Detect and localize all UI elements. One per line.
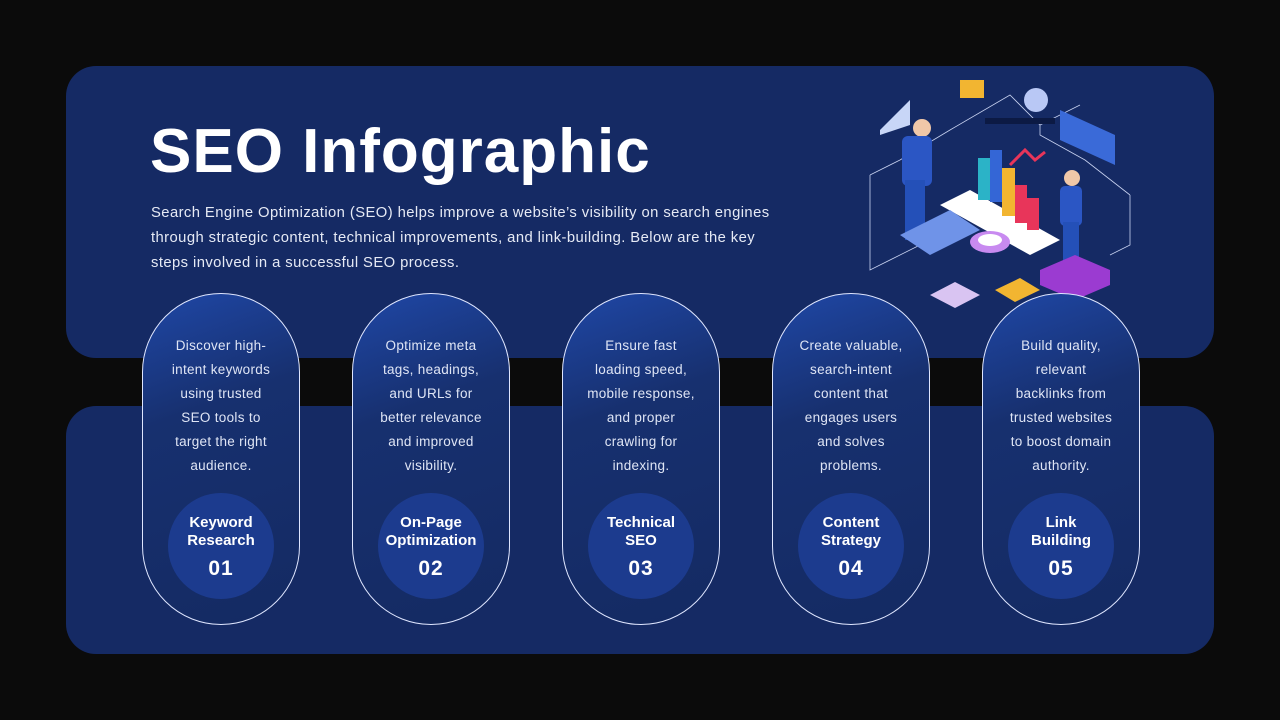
step 2: and URLs for (389, 386, 473, 401)
badge 03: 03 (628, 557, 654, 580)
step 1 (142, 293, 300, 625)
step 4 (772, 293, 930, 625)
step 5: trusted websites (1010, 410, 1112, 425)
step 5 (982, 293, 1140, 625)
badge 01: 01 (208, 557, 234, 580)
step 4: and solves (817, 434, 885, 449)
step 5: authority. (1032, 458, 1090, 473)
step 3: Ensure fast (605, 338, 677, 353)
badge 02 (378, 493, 484, 599)
badge 03 (588, 493, 694, 599)
step 3: loading speed, (595, 362, 687, 377)
illustration: SEO team analytics (870, 80, 1130, 308)
step 4: Create valuable, (799, 338, 903, 353)
step 5: Build quality, (1021, 338, 1101, 353)
podium (1040, 255, 1110, 300)
step 1: target the right (175, 434, 267, 449)
step 5: to boost domain (1011, 434, 1111, 449)
chart board (940, 118, 1060, 255)
badge 02: 02 (418, 557, 444, 580)
badge 03: SEO (625, 532, 657, 549)
step 3: and proper (607, 410, 675, 425)
step 2 (352, 293, 510, 625)
intro text (151, 205, 770, 271)
floor tiles (900, 210, 980, 255)
badge 04: Content (823, 514, 879, 531)
step 5: relevant (1036, 362, 1086, 377)
badge 04: Strategy (821, 532, 881, 549)
step 2: better relevance (380, 410, 482, 425)
step 2: visibility. (405, 458, 457, 473)
man (902, 119, 932, 240)
step 4: content that (814, 386, 888, 401)
step 3: mobile response, (587, 386, 695, 401)
badge 05: Building (1031, 532, 1091, 549)
intro text: steps involved in a successful SEO process. (151, 255, 459, 271)
step 4: search-intent (810, 362, 892, 377)
title: SEO Infographic (150, 117, 651, 186)
badge 05 (1008, 493, 1114, 599)
badge 01: Research (187, 532, 255, 549)
icons (960, 80, 984, 98)
badge 04 (798, 493, 904, 599)
panel: top (66, 66, 1214, 358)
step 1: intent keywords (172, 362, 270, 377)
badge 02: Optimization (386, 532, 476, 549)
step 3: crawling for (605, 434, 677, 449)
badge 01: Keyword (189, 514, 253, 531)
step 3 (562, 293, 720, 625)
step 1: using trusted (180, 386, 262, 401)
step 2: tags, headings, (383, 362, 479, 377)
badge 01 (168, 493, 274, 599)
badge 05: 05 (1048, 557, 1074, 580)
step 1: SEO tools to (181, 410, 261, 425)
badge 02: On-Page (400, 514, 462, 531)
intro text: through strategic content, technical improvements, and link-building. Below are the key (151, 230, 755, 246)
step 2: and improved (388, 434, 474, 449)
step 2: Optimize meta (386, 338, 476, 353)
badge 05: Link (1046, 514, 1076, 531)
step 1: audience. (190, 458, 252, 473)
woman (1060, 170, 1082, 277)
intro text: Search Engine Optimization (SEO) helps improve a website’s visibility on search engines (151, 205, 770, 221)
step 4: engages users (805, 410, 897, 425)
badge 03: Technical (607, 514, 675, 531)
step 5: backlinks from (1016, 386, 1106, 401)
badge 04: 04 (838, 557, 864, 580)
step 3: indexing. (613, 458, 669, 473)
panel: bottom (66, 406, 1214, 654)
step 4: problems. (820, 458, 882, 473)
step 1: Discover high- (176, 338, 266, 353)
